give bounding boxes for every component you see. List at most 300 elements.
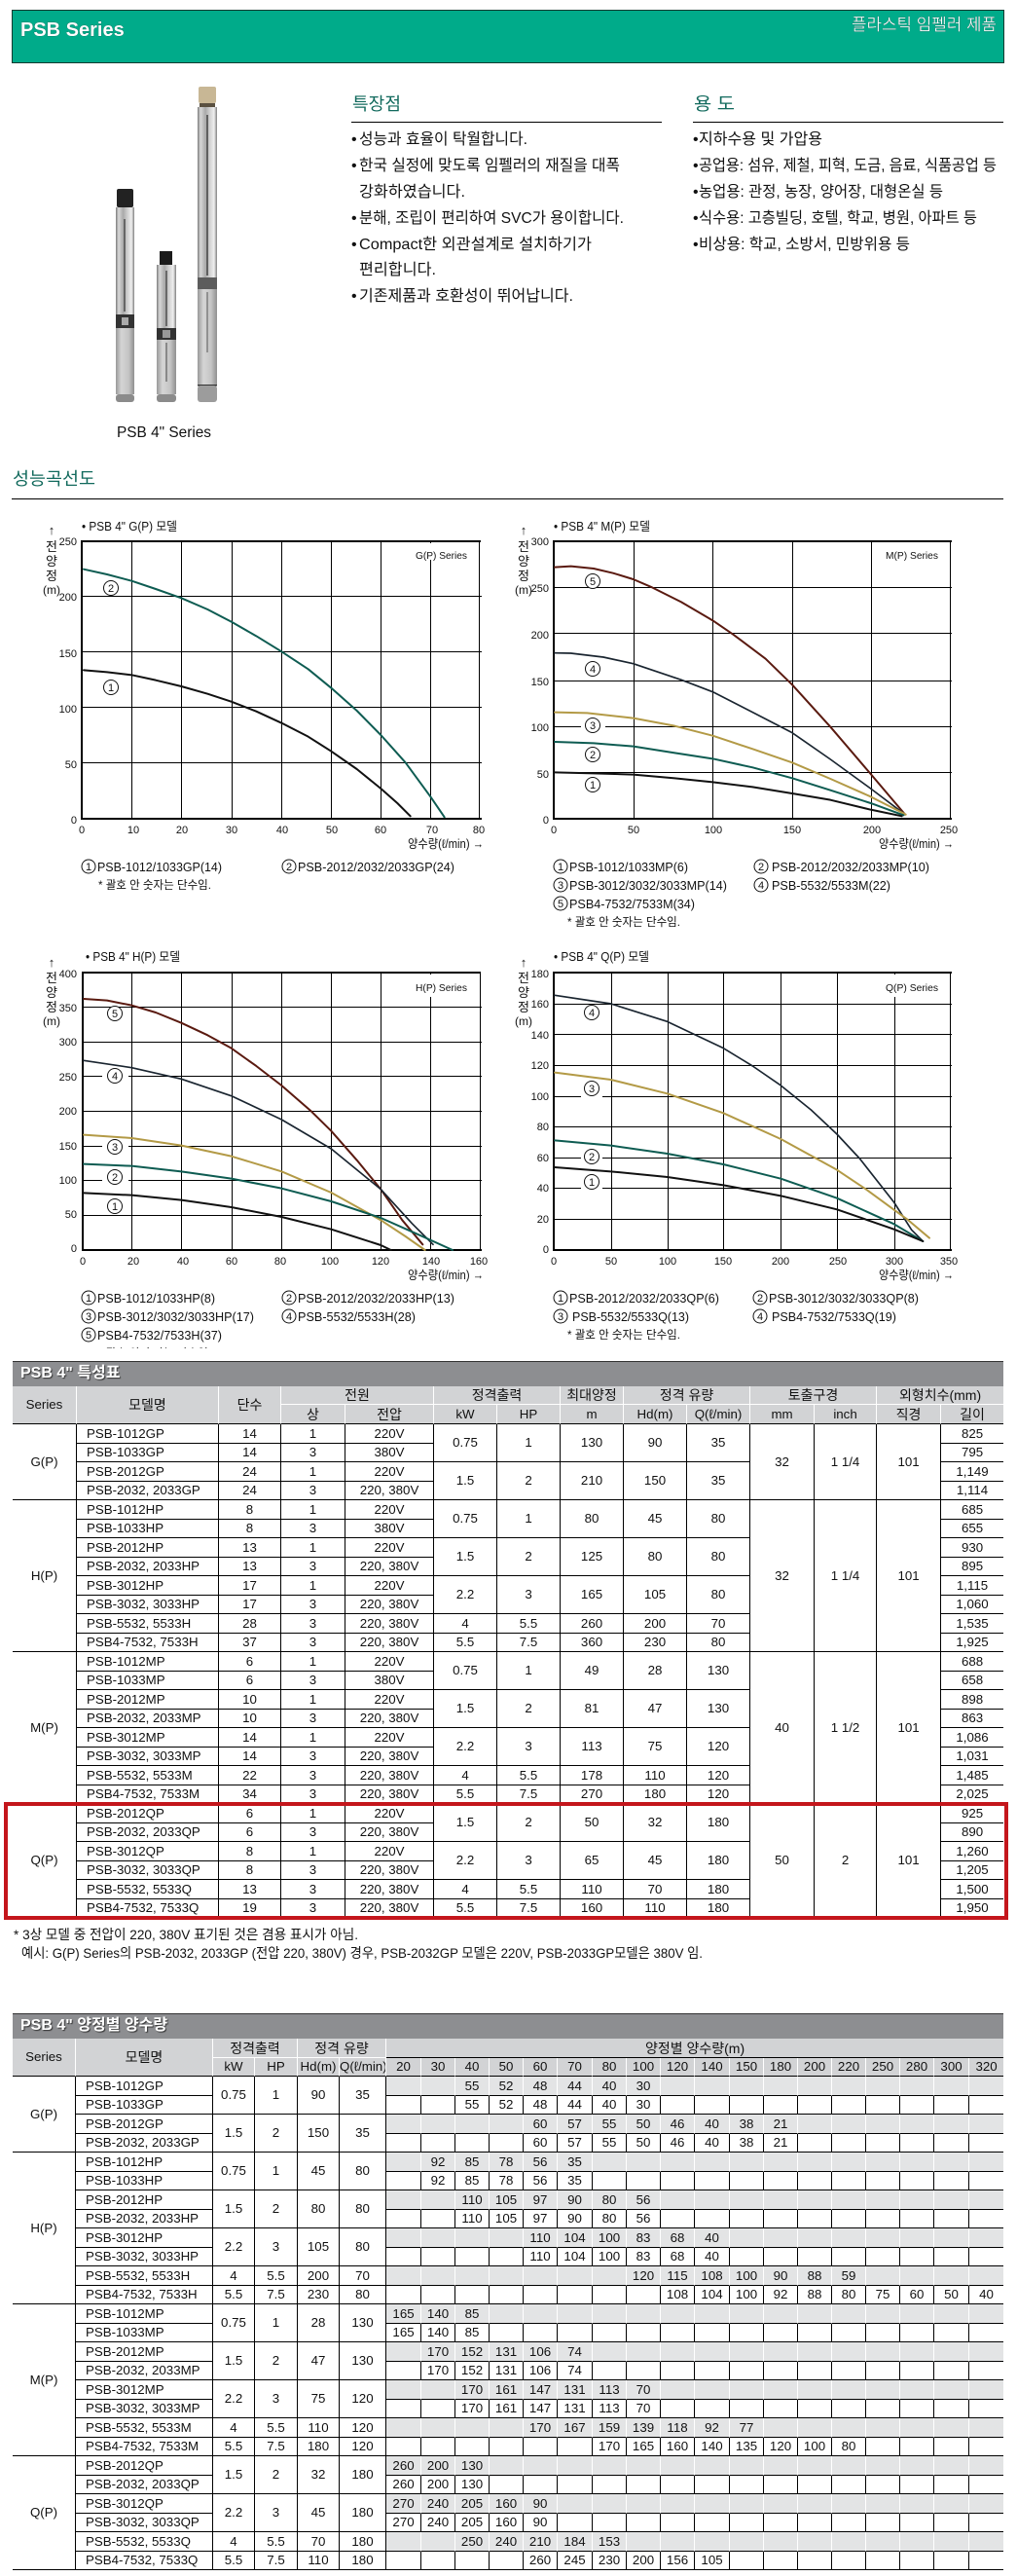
chart: Q(P) model: 0 xyxy=(551,1256,557,1268)
chart: H(P) model: 20 xyxy=(127,1256,139,1268)
chart: M(P) model: 100 xyxy=(531,722,549,734)
flow rows: H(P): 83 xyxy=(636,2249,650,2263)
spec rows: G(P): PSB-1012GP xyxy=(87,1425,164,1441)
spec rows: G(P): 101 xyxy=(897,1454,920,1468)
spec rows: M(P): 220, 380V xyxy=(360,1711,418,1725)
flow rows: H(P): 68 xyxy=(671,2229,684,2245)
flow rows: M(P): PSB-1012MP xyxy=(86,2305,164,2321)
chart: G(P) model: 150 xyxy=(59,648,77,660)
legend: 2 xyxy=(286,1293,292,1305)
text block: applications list: 공업용: 섬유, 제철, 피혁, 도금, 음료, 식품공업 등 xyxy=(699,157,997,174)
flow rows: Q(P): PSB-2032, 2033QP xyxy=(86,2477,200,2491)
spec rows: H(P): 101 xyxy=(897,1567,920,1583)
flow rows: G(P): PSB-2032, 2033GP xyxy=(86,2135,200,2150)
chart: M(P) model: 50 xyxy=(628,825,639,836)
spec rows: M(P): 1 xyxy=(309,1692,316,1706)
flow rows: H(P): 1 xyxy=(272,2163,279,2178)
legend: * 괄호 안 숫자는 단수임. xyxy=(567,1328,680,1342)
legend: PSB-5532/5533Q(13) xyxy=(572,1310,689,1324)
spec rows: H(P): 230 xyxy=(644,1635,666,1649)
flow rows: Q(P): 130 xyxy=(461,2457,483,2473)
chart: G(P) model: 0 xyxy=(71,815,77,827)
spec rows: Q(P): 180 xyxy=(708,1815,729,1829)
flow rows: Q(P): 200 xyxy=(633,2553,654,2567)
flow table header: 300 xyxy=(940,2059,963,2074)
flow rows: H(P): 50 xyxy=(944,2287,959,2301)
spec rows: Q(P): 180 xyxy=(708,1900,729,1915)
spec rows: M(P): 120 xyxy=(708,1768,729,1782)
flow rows: H(P): PSB-3032, 3033HP xyxy=(86,2249,199,2263)
flow rows: M(P): 85 xyxy=(465,2325,479,2339)
spec rows: Q(P): 2 xyxy=(842,1853,849,1867)
flow rows: H(P): 56 xyxy=(533,2173,547,2188)
chart: Q(P) model: 100 xyxy=(531,1091,549,1103)
spec rows: G(P): 210 xyxy=(581,1473,602,1488)
chart: M(P) model: 150 xyxy=(531,677,549,688)
flow rows: M(P): 113 xyxy=(599,2401,620,2415)
flow rows: M(P): 131 xyxy=(495,2344,517,2358)
flow rows: Q(P): PSB4-7532, 7533Q xyxy=(86,2553,198,2567)
spec rows: Q(P): 1,950 xyxy=(956,1900,989,1915)
chart: Q(P) model: 40 xyxy=(537,1183,549,1195)
spec rows: M(P): 180 xyxy=(644,1786,666,1801)
flow rows: H(P): 100 xyxy=(736,2268,757,2282)
flow rows: Q(P): 270 xyxy=(392,2496,415,2510)
spec rows: H(P): 220V xyxy=(374,1501,405,1517)
flow rows: M(P): 120 xyxy=(351,2420,374,2434)
text block: features list: 성능과 효율이 탁월합니다. xyxy=(359,130,527,148)
legend: PSB-2012/2032/2033HP(13) xyxy=(298,1292,454,1306)
flow rows: G(P): PSB-1012GP xyxy=(86,2078,163,2093)
flow rows: H(P): PSB-3012HP xyxy=(86,2229,163,2245)
spec rows: G(P): 35 xyxy=(711,1473,725,1488)
spec rows: M(P): 5.5 xyxy=(456,1786,474,1801)
spec rows: M(P): 3 xyxy=(309,1673,316,1687)
chart: Q(P) model: 양수량(ℓ/min) → xyxy=(879,1269,954,1282)
flow rows: Q(P): PSB-5532, 5533Q xyxy=(86,2533,191,2549)
text block: features list: 강화하였습니다. xyxy=(359,183,465,201)
spec rows: H(P): PSB-3032, 3033HP xyxy=(87,1597,200,1611)
chart: G(P) model xyxy=(43,520,485,892)
legend xyxy=(554,860,929,929)
spec rows: H(P) xyxy=(13,1500,1003,1652)
flow rows: H(P): 45 xyxy=(311,2163,325,2178)
chart: G(P) model: 30 xyxy=(226,825,237,836)
flow rows: H(P): 80 xyxy=(602,2192,616,2206)
spec rows: H(P): 2.2 xyxy=(456,1587,474,1601)
chart: H(P) model: ↑ xyxy=(49,955,54,970)
flow rows: Q(P): 45 xyxy=(311,2505,325,2520)
chart: G(P) model: 250 xyxy=(59,536,77,548)
flow table header: 180 xyxy=(770,2059,791,2074)
spec rows: G(P): 380V xyxy=(374,1445,405,1459)
spec rows: M(P): 3 xyxy=(309,1711,316,1725)
spec rows: M(P): 101 xyxy=(897,1719,920,1735)
flow rows: G(P): PSB-2012GP xyxy=(86,2116,163,2130)
flow rows: H(P): 56 xyxy=(636,2192,650,2206)
spec rows: M(P): PSB-2032, 2033MP xyxy=(87,1711,201,1725)
chart: G(P) model: 정 xyxy=(46,569,57,583)
spec table header: 정격 유량 xyxy=(660,1387,713,1403)
spec table header: 토출구경 xyxy=(788,1387,838,1403)
spec rows: M(P): 22 xyxy=(242,1768,257,1782)
spec rows: Q(P): 65 xyxy=(585,1853,599,1867)
spec rows: Q(P): 110 xyxy=(581,1881,602,1896)
chart: G(P) model: • PSB 4" G(P) 모델 xyxy=(82,520,177,534)
flow rows: H(P): 104 xyxy=(563,2229,586,2245)
chart: M(P) model: 100 xyxy=(705,825,722,836)
curve labels xyxy=(581,574,605,792)
spec rows: H(P): 1,115 xyxy=(957,1577,988,1593)
chart: H(P) model: 40 xyxy=(177,1256,189,1268)
flow rows: H(P): 40 xyxy=(705,2229,719,2245)
spec rows: Q(P): 8 xyxy=(246,1844,253,1858)
chart: H(P) model: 160 xyxy=(470,1256,488,1268)
chart: G(P) model: 양수량(ℓ/min) → xyxy=(408,837,484,851)
flow rows: G(P): 0.75 xyxy=(221,2087,246,2102)
legend: 1 xyxy=(558,1293,563,1305)
flow rows: M(P): 85 xyxy=(465,2305,479,2321)
flow rows: Q(P): 160 xyxy=(495,2515,517,2529)
spec rows: Q(P): 925 xyxy=(962,1805,983,1821)
spec rows: Q(P): 3 xyxy=(309,1881,316,1896)
chart: Q(P) model: 300 xyxy=(886,1256,903,1268)
spec rows: G(P): 1,149 xyxy=(956,1464,989,1478)
chart: Q(P) model: 정 xyxy=(518,1000,529,1014)
spec rows: M(P) xyxy=(30,1652,1003,1802)
text block: applications list: • xyxy=(693,131,699,148)
spec rows: H(P): PSB4-7532, 7533H xyxy=(87,1635,199,1649)
spec rows: H(P): PSB-2012HP xyxy=(87,1540,163,1554)
flow rows: M(P): 130 xyxy=(351,2315,374,2330)
heading: applications: 용 도 xyxy=(694,94,735,114)
spec rows: G(P): PSB-2012GP xyxy=(87,1464,164,1478)
spec rows: H(P): 13 xyxy=(242,1540,257,1554)
spec rows: H(P): PSB-3012HP xyxy=(87,1577,163,1593)
spec rows: M(P): 113 xyxy=(581,1739,602,1753)
flow rows: G(P): 60 xyxy=(533,2135,547,2150)
legend: 3 xyxy=(558,880,563,892)
flow rows: H(P): 78 xyxy=(499,2153,513,2169)
chart: H(P) model: 120 xyxy=(372,1256,389,1268)
flow table header: 양정별 양수량(m) xyxy=(645,2041,745,2056)
spec rows: H(P): 200 xyxy=(644,1616,666,1630)
spec rows: G(P): PSB-1033GP xyxy=(87,1445,164,1459)
spec rows: G(P): 130 xyxy=(581,1435,602,1450)
flow rows: M(P): 28 xyxy=(311,2315,325,2330)
text block: features list: • xyxy=(351,210,357,227)
spec table header xyxy=(13,1386,1003,1424)
text block: applications list: 지하수용 및 가압용 xyxy=(699,130,822,148)
flow table header: 40 xyxy=(465,2059,479,2074)
callout: red highlight box around Q(P) rows xyxy=(4,1802,1008,1920)
spec rows: H(P): 3 xyxy=(309,1616,316,1630)
spec rows: H(P): 80 xyxy=(711,1587,725,1601)
flow rows: Q(P): 184 xyxy=(563,2533,586,2549)
spec rows: M(P): 75 xyxy=(648,1739,662,1753)
flow rows: H(P): 78 xyxy=(499,2173,513,2188)
spec rows: M(P): 14 xyxy=(242,1748,257,1763)
legend xyxy=(82,1291,454,1360)
spec rows: M(P): 40 xyxy=(775,1719,789,1735)
spec rows: Q(P): PSB-5532, 5533Q xyxy=(87,1881,192,1896)
flow rows: G(P): 48 xyxy=(533,2078,547,2093)
flow rows: M(P): 147 xyxy=(529,2381,551,2397)
spec rows: H(P): 220V xyxy=(374,1577,405,1593)
spec rows: G(P): 24 xyxy=(242,1483,257,1497)
flow rows: M(P): 170 xyxy=(427,2344,449,2358)
flow rows: G(P): 60 xyxy=(533,2116,547,2130)
text block: features list: • xyxy=(351,131,357,148)
legend: PSB-3012/3032/3033MP(14) xyxy=(569,879,727,893)
flow rows: H(P): 88 xyxy=(808,2268,821,2282)
flow rows: Q(P): 180 xyxy=(351,2467,374,2482)
spec rows: G(P) xyxy=(13,1424,1003,1500)
spec rows: H(P): 4 xyxy=(461,1616,469,1630)
chart: Q(P) model: 100 xyxy=(659,1256,676,1268)
spec rows: Q(P): 8 xyxy=(246,1862,253,1877)
chart: H(P) model: 50 xyxy=(65,1209,77,1221)
flow rows: H(P): 97 xyxy=(533,2192,547,2206)
spec rows: M(P): 220V xyxy=(374,1653,405,1669)
flow rows: M(P): PSB-5532, 5533M xyxy=(86,2420,192,2434)
curve labels: 3 xyxy=(590,720,596,732)
flow rows: Q(P): 90 xyxy=(533,2496,547,2510)
spec rows: H(P): 0.75 xyxy=(453,1511,478,1526)
flow rows: M(P): 2 xyxy=(272,2353,279,2368)
legend: PSB-1012/1033MP(6) xyxy=(569,861,688,874)
flow rows: H(P): 40 xyxy=(979,2287,994,2301)
flow table header: 320 xyxy=(975,2059,998,2074)
flow rows: M(P): 5.5 xyxy=(225,2439,242,2453)
spec rows: H(P): 80 xyxy=(648,1549,662,1564)
flow rows: H(P): 4 xyxy=(230,2268,237,2282)
chart: Q(P) model: 60 xyxy=(537,1153,549,1164)
spec rows: Q(P): 220, 380V xyxy=(360,1900,418,1915)
spec rows: H(P): 380V xyxy=(374,1521,405,1535)
flow rows: H(P): 80 xyxy=(842,2287,855,2301)
spec rows: H(P): 1 1/4 xyxy=(831,1567,859,1583)
chart: H(P) model: (m) xyxy=(43,1014,60,1028)
flow rows: H(P): 80 xyxy=(311,2201,325,2216)
flow rows: M(P): 120 xyxy=(770,2439,791,2453)
spec table header: inch xyxy=(833,1406,857,1421)
spec rows: G(P): 24 xyxy=(242,1464,257,1478)
legend: 1 xyxy=(86,862,91,873)
legend: PSB4-7532/7533M(34) xyxy=(569,898,695,911)
legend: 1 xyxy=(558,862,563,873)
flow rows: H(P): 35 xyxy=(567,2173,582,2188)
flow rows: M(P): PSB-2012MP xyxy=(86,2344,164,2358)
text block: spec table footnotes: 예시: G(P) Series의 PSB-2032, 2033GP (전압 220, 380V) 경우, PSB-2032GP 모델은 220V, PSB-2033GP모델은 380V 임. xyxy=(21,1945,703,1961)
spec rows: M(P): 863 xyxy=(962,1711,983,1725)
spec rows: Q(P): 2.2 xyxy=(456,1853,474,1867)
spec rows: G(P): 14 xyxy=(242,1445,257,1459)
chart: H(P) model: 60 xyxy=(226,1256,237,1268)
flow rows: H(P): 100 xyxy=(736,2287,757,2301)
flow rows: G(P): 57 xyxy=(567,2135,582,2150)
chart: Q(P) model: 80 xyxy=(537,1122,549,1133)
legend: * 괄호 안 숫자는 단수임. xyxy=(98,878,211,892)
spec rows: H(P): 220, 380V xyxy=(360,1559,418,1573)
flow rows: H(P): 105 xyxy=(308,2239,329,2254)
chart: Q(P) model: 250 xyxy=(829,1256,847,1268)
spec rows: G(P): 1.5 xyxy=(456,1473,474,1488)
flow rows: M(P): 140 xyxy=(427,2305,449,2321)
chart: M(P) model: 200 xyxy=(531,630,549,642)
spec rows: M(P): 6 xyxy=(246,1673,253,1687)
flow rows: M(P): 170 xyxy=(461,2401,483,2415)
flow rows: M(P): 170 xyxy=(427,2363,449,2377)
spec rows: M(P): 14 xyxy=(242,1729,257,1745)
flow rows: H(P): 70 xyxy=(355,2268,370,2282)
chart: M(P) model: 200 xyxy=(863,825,881,836)
chart: Q(P) model: 120 xyxy=(531,1060,549,1072)
chart: H(P) model: 350 xyxy=(59,1003,77,1014)
spec rows: Q(P): 180 xyxy=(708,1881,729,1896)
flow rows: G(P): 55 xyxy=(465,2097,479,2112)
chart: M(P) model: 50 xyxy=(537,769,549,781)
chart: H(P) model: 0 xyxy=(71,1243,77,1255)
flow rows: M(P): PSB4-7532, 7533M xyxy=(86,2439,199,2453)
chart: Q(P) model: 200 xyxy=(772,1256,789,1268)
spec rows: M(P): 6 xyxy=(246,1653,253,1669)
chart: Q(P) model: (m) xyxy=(515,1014,532,1028)
spec rows: Q(P): 3 xyxy=(309,1862,316,1877)
legend: PSB-3012/3032/3033QP(8) xyxy=(769,1292,919,1306)
chart: M(P) model: • PSB 4" M(P) 모델 xyxy=(554,520,650,534)
legend: PSB-3012/3032/3033HP(17) xyxy=(97,1310,254,1324)
legend: PSB-2012/2032/2033GP(24) xyxy=(298,861,454,874)
chart: H(P) model xyxy=(43,950,488,1360)
curves xyxy=(555,995,929,1241)
flow rows: M(P): 140 xyxy=(427,2325,449,2339)
flow rows: H(P): 83 xyxy=(636,2229,650,2245)
flow rows: H(P): 105 xyxy=(495,2211,517,2226)
flow rows: M(P): 147 xyxy=(529,2401,551,2415)
spec rows: H(P): PSB-1033HP xyxy=(87,1521,163,1535)
flow rows: M(P): 47 xyxy=(311,2353,325,2368)
chart: Q(P) model: 0 xyxy=(543,1244,549,1256)
flow rows: Q(P): 210 xyxy=(529,2533,551,2549)
spec rows: H(P): 360 xyxy=(581,1635,602,1649)
legend: * 괄호 안 숫자는 단수임. xyxy=(567,915,680,929)
legend: PSB-5532/5533M(22) xyxy=(772,879,890,893)
flow rows: M(P): 5.5 xyxy=(267,2420,285,2434)
spec rows: H(P): 8 xyxy=(246,1501,253,1517)
flow table header: 280 xyxy=(906,2059,927,2074)
chart: H(P) model: 200 xyxy=(59,1106,77,1118)
chart: G(P) model: 60 xyxy=(375,825,386,836)
flow rows: G(P): 1 xyxy=(272,2087,279,2102)
spec rows: H(P): H(P) xyxy=(31,1567,57,1583)
flow rows: M(P): 74 xyxy=(567,2363,582,2377)
spec rows: Q(P): 1 xyxy=(309,1805,316,1821)
flow rows: M(P): 120 xyxy=(351,2439,374,2453)
flow rows: M(P): 4 xyxy=(230,2420,237,2434)
spec rows: Q(P): 1,260 xyxy=(956,1844,989,1858)
spec rows: G(P): 3 xyxy=(309,1445,316,1459)
spec rows: M(P): 0.75 xyxy=(453,1663,478,1677)
flow rows: G(P): 57 xyxy=(567,2116,582,2130)
chart: H(P) model: 100 xyxy=(321,1256,339,1268)
chart: H(P) model: 80 xyxy=(274,1256,286,1268)
spec rows: M(P): PSB4-7532, 7533M xyxy=(87,1786,200,1801)
chart: H(P) model: 정 xyxy=(46,1000,57,1014)
spec rows: Q(P): 3 xyxy=(309,1900,316,1915)
text block: spec table footnotes: * 3상 모델 중 전압이 220, 380V 표기된 것은 겸용 표시가 아님. xyxy=(14,1927,358,1942)
spec rows: G(P): 220V xyxy=(374,1425,405,1441)
flow rows: Q(P): 200 xyxy=(427,2457,449,2473)
flow rows: H(P): 108 xyxy=(667,2287,688,2301)
flow rows: G(P): 50 xyxy=(636,2116,650,2130)
spec rows: M(P): 130 xyxy=(708,1701,729,1715)
flow rows: M(P) xyxy=(13,2304,1003,2456)
spec rows: M(P): 130 xyxy=(708,1663,729,1677)
spec rows: M(P): 898 xyxy=(962,1692,983,1706)
spec rows: M(P): 2,025 xyxy=(956,1786,989,1801)
flow rows: Q(P): 260 xyxy=(392,2477,415,2491)
spec rows: H(P): 17 xyxy=(242,1597,257,1611)
chart: Q(P) model: 20 xyxy=(537,1214,549,1226)
chart: H(P) model: 0 xyxy=(80,1256,86,1268)
text block: applications list: 비상용: 학교, 소방서, 민방위용 등 xyxy=(699,236,910,253)
flow rows: M(P): 170 xyxy=(461,2381,483,2397)
spec table header: Hd(m) xyxy=(637,1406,672,1421)
chart: Q(P) model: 150 xyxy=(714,1256,732,1268)
flow rows: M(P): 152 xyxy=(461,2363,483,2377)
spec rows: M(P): 10 xyxy=(242,1692,257,1706)
flow rows: H(P): 110 xyxy=(461,2211,483,2226)
heading: flow table title bar xyxy=(13,2013,1003,2039)
spec rows: M(P): 4 xyxy=(461,1768,469,1782)
flow rows: G(P): 55 xyxy=(602,2135,616,2150)
chart: Q(P) model: 양 xyxy=(518,985,529,1000)
spec rows: H(P): 80 xyxy=(585,1511,599,1526)
chart: G(P) model: 10 xyxy=(127,825,139,836)
spec rows: M(P): 1 1/2 xyxy=(831,1719,859,1735)
spec rows: M(P): PSB-3032, 3033MP xyxy=(87,1748,201,1763)
title banner: PSB Series xyxy=(20,19,125,41)
chart: M(P) model: 300 xyxy=(531,536,549,548)
flow by head table xyxy=(13,2039,1003,2570)
spec rows: H(P): 220V xyxy=(374,1540,405,1554)
legend: PSB-5532/5533H(28) xyxy=(298,1310,416,1324)
flow rows: M(P): PSB-1033MP xyxy=(86,2325,164,2339)
spec rows: Q(P): 180 xyxy=(708,1853,729,1867)
flow rows: Q(P): 130 xyxy=(461,2477,483,2491)
flow rows: G(P): 40 xyxy=(602,2097,616,2112)
chart: G(P) model: 20 xyxy=(176,825,188,836)
flow rows: H(P): 85 xyxy=(465,2153,479,2169)
legend: 5 xyxy=(86,1330,91,1342)
flow rows: H(P): 80 xyxy=(355,2239,370,2254)
curve labels: 4 xyxy=(589,1008,595,1019)
flow rows: M(P): 2.2 xyxy=(225,2391,242,2406)
spec rows: M(P): M(P) xyxy=(30,1719,58,1735)
flow rows: H(P): 108 xyxy=(701,2268,723,2282)
spec rows: H(P): 8 xyxy=(246,1521,253,1535)
chart: H(P) model: 양수량(ℓ/min) → xyxy=(408,1269,484,1282)
spec rows: G(P): 150 xyxy=(644,1473,666,1488)
flow rows: Q(P) xyxy=(13,2456,1003,2570)
flow rows: G(P): 90 xyxy=(311,2087,325,2102)
flow rows: H(P): 105 xyxy=(495,2192,517,2206)
flow rows: G(P): 21 xyxy=(774,2116,787,2130)
flow rows: G(P): 21 xyxy=(774,2135,787,2150)
spec rows: Q(P): 32 xyxy=(648,1815,662,1829)
flow rows: H(P): 110 xyxy=(529,2249,551,2263)
